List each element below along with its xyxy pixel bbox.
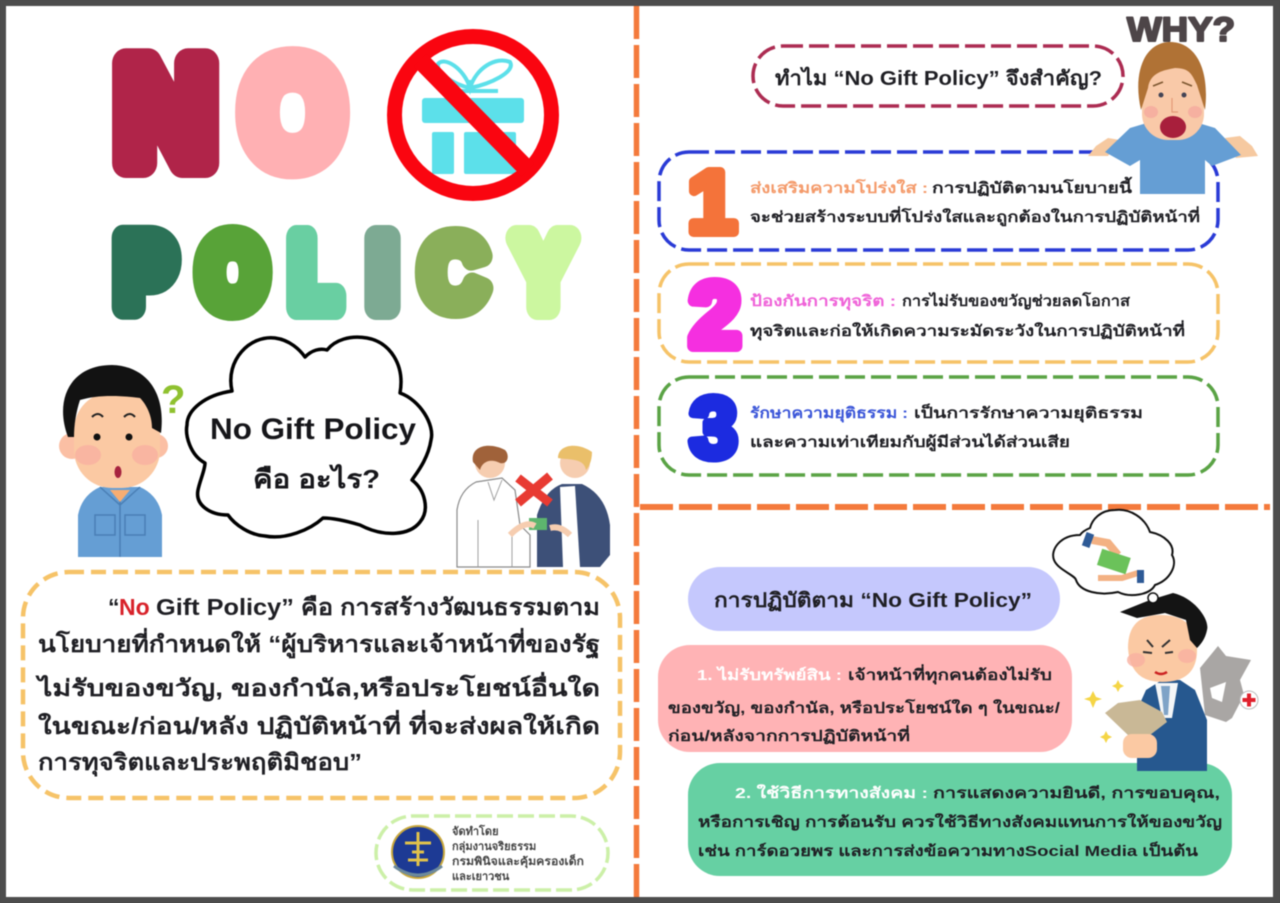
panel: step 1: ของขวัญ, ของกำนัล, หรือประโยชน์ใด ๆ ในขณะ/: [668, 698, 1061, 717]
callout: what is No Gift Policy cloud: [187, 337, 432, 537]
icon: two men refusing money: [457, 446, 610, 567]
panel: definition: ในขณะ/ก่อน/หลัง ปฏิบัติหน้าที่ ที่จะส่งผลให้เกิด: [38, 709, 600, 739]
title: POLICY: P: [117, 216, 174, 329]
panel: reason 2: ทุจริตและก่อให้เกิดความระมัดระวังในการปฏิบัติหน้าที่: [750, 320, 1185, 341]
title: POLICY: I: [370, 218, 395, 329]
panel: definition: “: [108, 594, 120, 620]
panel: definition: นโยบายที่กำหนดให้ “ผู้บริหารและเจ้าหน้าที่ของรัฐ: [38, 627, 600, 659]
panel: definition: Gift Policy” คือ การสร้างวัฒนธรรมตาม: [156, 594, 600, 620]
number 1: 1: [688, 154, 736, 251]
title: NO: [117, 31, 342, 195]
panel: definition: [23, 572, 620, 798]
title: POLICY: Y: [515, 216, 572, 329]
panel: reason 2: การไม่รับของขวัญช่วยลดโอกาส: [902, 291, 1131, 310]
number 2: 2: [690, 266, 740, 366]
panel: reason 3: เป็นการรักษาความยุติธรรม: [914, 403, 1143, 423]
panel: step 2: หรือการเชิญ การต้อนรับ ควรใช้วิธีทางสังคมแทนการให้ของขวัญ: [698, 813, 1222, 831]
icon: confused man: [59, 365, 185, 557]
heading: follow No Gift Policy: [688, 567, 1060, 631]
panel: step 1: 1. ไม่รับทรัพย์สิน :: [697, 665, 842, 684]
panel: reason 1: การปฏิบัติตามนโยบายนี้: [932, 176, 1133, 197]
title: POLICY: C: [421, 218, 486, 329]
panel: definition: ไม่รับของขวัญ, ของกำนัล,หรือประโยชน์อื่นใด: [34, 671, 600, 702]
panel: definition: No: [119, 594, 150, 620]
panel: reason 2: ป้องกันการทุจริต :: [750, 292, 896, 311]
panel: step 1: เจ้าหน้าที่ทุกคนต้องไม่รับ: [848, 664, 1052, 685]
number 3: 3: [690, 381, 737, 476]
panel: step 2: การแสดงความยินดี, การขอบคุณ,: [933, 784, 1220, 803]
callout: what is No Gift Policy cloud: คือ อะไร?: [253, 463, 380, 494]
icon: no gift sign: [394, 36, 552, 194]
panel: reason 2: [659, 264, 1218, 366]
title: NO: N: [117, 31, 214, 194]
icon: confused man: ?: [161, 378, 185, 422]
panel: step 1: [658, 645, 1072, 752]
panel: organiser credit: และเยาวชน: [452, 871, 510, 883]
panel: reason 1: ส่งเสริมความโปร่งใส :: [750, 178, 928, 197]
panel: definition: การทุจริตและประพฤติมิชอบ”: [38, 749, 362, 777]
panel: step 2: 2. ใช้วิธีการทางสังคม :: [735, 784, 928, 802]
title: NO: O: [243, 32, 342, 195]
panel: reason 1: จะช่วยสร้างระบบที่โปร่งใสและถูกต้องในการปฏิบัติหน้าที่: [750, 206, 1200, 227]
panel: organiser credit: กลุ่มงานจริยธรรม: [452, 840, 536, 854]
panel: organiser credit: กรมพินิจและคุ้มครองเด็ก: [452, 854, 584, 869]
panel: step 2: เช่น การ์ดอวยพร และการส่งข้อความทางSocial Media เป็นต้น: [698, 841, 1199, 860]
panel: reason 3: [659, 377, 1218, 476]
icon: thought bubble with money: [1053, 510, 1174, 595]
icon: why man: WHY?: [1127, 11, 1235, 49]
panel: reason 3: และความเท่าเทียมกับผู้มีส่วนได้ส่วนเสีย: [750, 432, 1070, 452]
panel: step 1: ก่อน/หลังจากการปฏิบัติหน้าที่: [668, 725, 910, 745]
panel: reason 1: [659, 152, 1218, 251]
heading: why important: [753, 46, 1123, 106]
icon: why man: [1088, 11, 1258, 194]
title: POLICY: [117, 216, 572, 329]
title: POLICY: L: [291, 218, 339, 329]
heading: follow No Gift Policy: การปฏิบัติตาม “No Gift Policy”: [714, 590, 1032, 612]
callout: what is No Gift Policy cloud: No Gift Policy: [210, 413, 416, 446]
title: POLICY: O: [200, 216, 265, 329]
icon: agency seal: [392, 826, 444, 878]
heading: why important: ทำไม “No Gift Policy” จึงสำคัญ?: [775, 66, 1102, 90]
panel: reason 3: รักษาความยุติธรรม :: [750, 404, 908, 423]
panel: organiser credit: จัดทำโดย: [452, 824, 499, 838]
icon: businessman with cash and cat: [1084, 593, 1258, 771]
panel: organiser credit: [376, 816, 608, 890]
panel: step 2: [688, 763, 1232, 876]
